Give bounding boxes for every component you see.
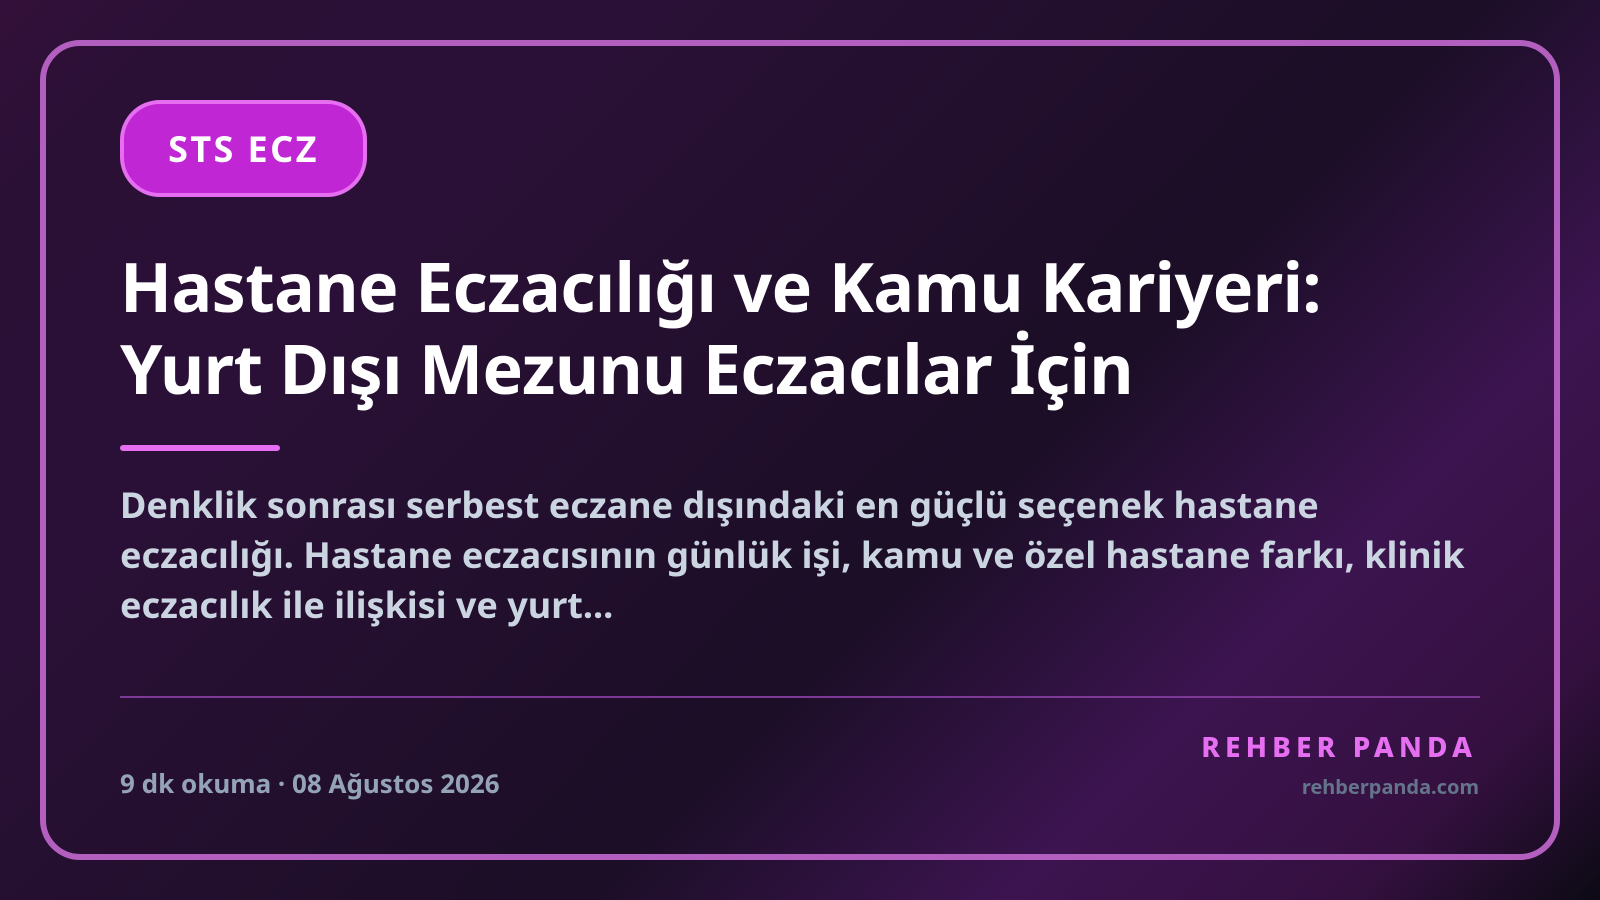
badge: STS ECZ: STS ECZ [168,124,319,173]
brand name: REHBER PANDA [1201,728,1477,766]
description text: eczacılığı. Hastane eczacısının günlük işi, kamu ve özel hastane farkı, klinik [120,530,1465,579]
badge: STS ECZ [120,100,367,197]
title: Hastane Eczacılığı ve Kamu Kariyeri: [120,239,1321,332]
reading time and date: 9 dk okuma · 08 Ağustos 2026 [120,765,500,801]
description text [120,480,1465,629]
accent rule [120,445,280,451]
description text: eczacılık ile ilişkisi ve yurt... [120,580,613,629]
title: Yurt Dışı Mezunu Eczacılar İçin [120,321,1133,414]
description text: Denklik sonrası serbest eczane dışındaki en güçlü seçenek hastane [120,480,1319,529]
website: rehberpanda.com [1302,773,1479,800]
footer divider [120,696,1480,698]
title [120,239,1321,414]
